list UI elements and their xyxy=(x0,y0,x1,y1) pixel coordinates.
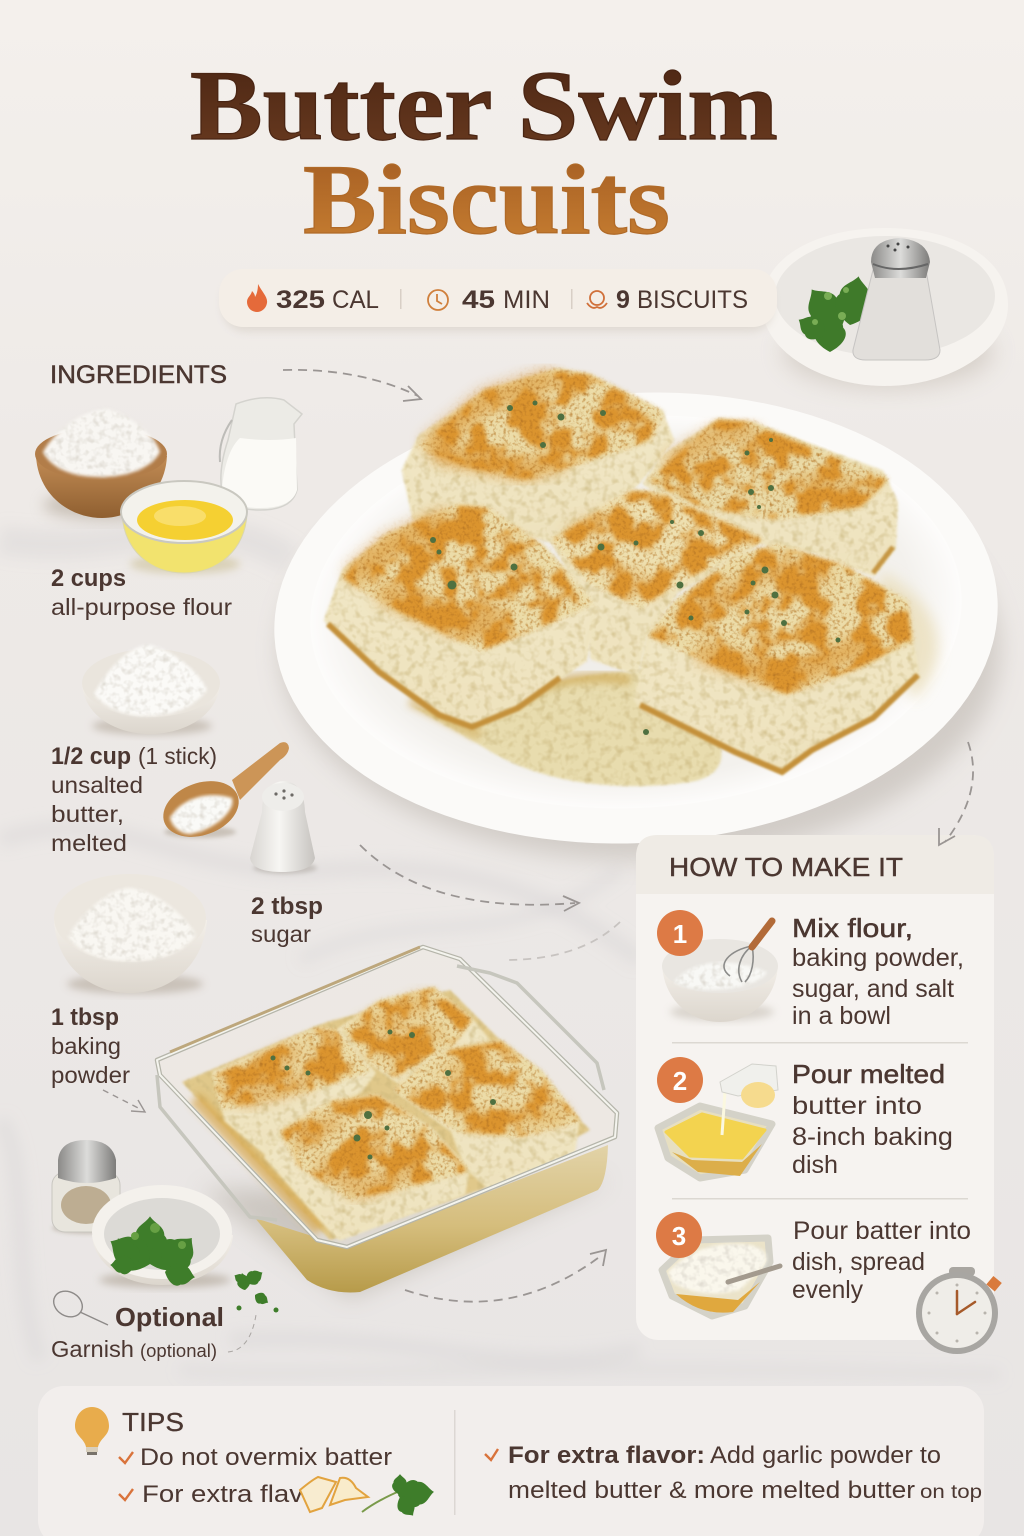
title xyxy=(190,50,778,255)
step 3: Pour batter into xyxy=(793,1217,971,1245)
time: 45 xyxy=(462,286,495,314)
servings: 9 xyxy=(616,286,630,314)
text: sugar: 2 tbsp xyxy=(251,893,323,920)
text: flour: 2 cups xyxy=(51,565,126,592)
ingredient: flour wooden bowl xyxy=(35,409,167,520)
step 3: evenly xyxy=(792,1276,863,1304)
tip: do not overmix: Do not overmix batter xyxy=(140,1444,392,1471)
text: baking powder: baking xyxy=(51,1033,121,1059)
heading: ingredients: INGREDIENTS xyxy=(50,361,227,389)
ingredient: parsley bowl xyxy=(92,1185,233,1289)
icon: biscuit xyxy=(587,291,607,308)
calories: 325 xyxy=(276,286,325,314)
time: MIN xyxy=(503,286,550,314)
plate with biscuits xyxy=(263,372,1009,862)
baking dish with biscuits xyxy=(157,947,617,1298)
butter spill xyxy=(410,570,938,786)
icon: light bulb xyxy=(75,1407,109,1455)
dish rim and handles xyxy=(157,947,617,1247)
icon: stopwatch xyxy=(916,1267,1002,1354)
calories: CAL xyxy=(332,286,379,314)
step 3: dish, spread xyxy=(792,1248,925,1276)
bowl: salt shaker and parsley xyxy=(762,228,1008,388)
dish biscuit: back right xyxy=(340,990,487,1087)
garlic slices xyxy=(300,1477,368,1512)
dish biscuit: front right xyxy=(397,1043,577,1187)
text: butter: 1/2 cup xyxy=(51,743,131,770)
biscuit: front right xyxy=(636,547,918,772)
biscuit: center xyxy=(553,493,759,672)
dish herb flecks xyxy=(270,1030,496,1160)
ingredient: salt shaker xyxy=(250,781,317,874)
step 1: 1 xyxy=(673,919,687,949)
title: Biscuits xyxy=(303,144,670,255)
text: butter: melted xyxy=(51,830,127,856)
text: optional garnish: Garnish xyxy=(51,1336,134,1362)
step 2: dish xyxy=(792,1151,838,1179)
text: baking powder: powder xyxy=(51,1062,130,1088)
step 3: 3 xyxy=(672,1221,686,1251)
arrow: ingredients to plate xyxy=(283,370,421,401)
text: baking powder xyxy=(51,1004,130,1088)
step 1: baking powder, xyxy=(792,944,964,972)
step 2: 8-inch baking xyxy=(792,1123,953,1151)
biscuit: back right xyxy=(646,422,895,573)
tip: full extra flavor: melted butter & more melted butter xyxy=(508,1477,915,1504)
biscuit: front left xyxy=(326,507,595,727)
tip: full extra flavor: Add garlic powder to xyxy=(710,1442,941,1469)
tip: full extra flavor xyxy=(485,1442,982,1504)
dish front wall xyxy=(255,1145,608,1292)
text: optional garnish: (optional) xyxy=(140,1341,217,1361)
ingredient: wooden spoon with sugar xyxy=(155,742,289,847)
dish biscuit: back left xyxy=(215,1030,373,1153)
tip: extra flavor cut off: For extra flav xyxy=(142,1481,303,1508)
herb flecks xyxy=(430,400,840,642)
step 1 xyxy=(657,910,964,1030)
dish biscuit: front left xyxy=(267,1097,467,1238)
stats pill xyxy=(219,269,777,332)
step 2: 2 xyxy=(673,1066,687,1096)
servings: BISCUITS xyxy=(637,286,748,314)
text: butter xyxy=(51,743,217,856)
arrow: dish to panel xyxy=(405,1250,606,1302)
step 1: sugar, and salt xyxy=(792,975,954,1003)
text: sugar: sugar xyxy=(251,921,311,947)
ingredient: butter bowl (white powder) xyxy=(82,645,220,735)
panel: tips xyxy=(38,1386,984,1536)
arrow: middle to panel xyxy=(360,845,620,960)
icon: flame xyxy=(247,284,267,312)
biscuit: back center xyxy=(405,372,671,540)
tip: full extra flavor: For extra flavor: xyxy=(508,1442,705,1469)
text: optional garnish: Optional xyxy=(115,1302,224,1332)
ingredient: melted butter glass bowl xyxy=(121,481,247,574)
dish interior floor xyxy=(157,947,617,1247)
icon: sieve xyxy=(49,1286,108,1325)
text: flour xyxy=(51,565,232,620)
step 2 xyxy=(657,1057,953,1179)
arrow: plate to steps xyxy=(939,742,973,845)
parsley sprig xyxy=(362,1474,435,1521)
panel: how to make it xyxy=(636,835,994,1340)
ingredient: baking powder bowl xyxy=(54,874,207,994)
ingredient: pepper shaker xyxy=(52,1140,124,1234)
step 2: Pour melted xyxy=(792,1059,945,1089)
text: flour: all-purpose flour xyxy=(51,594,232,620)
tip: full extra flavor: on top xyxy=(920,1482,982,1503)
text: butter: unsalted xyxy=(51,772,143,798)
text: optional garnish xyxy=(51,1302,256,1362)
text: sugar xyxy=(251,893,323,947)
ingredient: milk jug xyxy=(220,398,302,510)
tips heading: TIPS xyxy=(122,1407,184,1437)
text: butter: butter, xyxy=(51,801,124,827)
arrow: powder to dish xyxy=(103,1090,145,1112)
parsley sprig xyxy=(232,1266,278,1312)
title: Butter Swim xyxy=(190,50,778,161)
text: butter: (1 stick) xyxy=(138,743,217,769)
step 2: butter into xyxy=(792,1092,922,1120)
step 1: in a bowl xyxy=(792,1002,891,1030)
panel heading: HOW TO MAKE IT xyxy=(669,852,903,882)
text: baking powder: 1 tbsp xyxy=(51,1004,119,1031)
step 3 xyxy=(656,1212,971,1316)
step 1: Mix flour, xyxy=(792,913,913,943)
icon: clock xyxy=(428,290,448,310)
